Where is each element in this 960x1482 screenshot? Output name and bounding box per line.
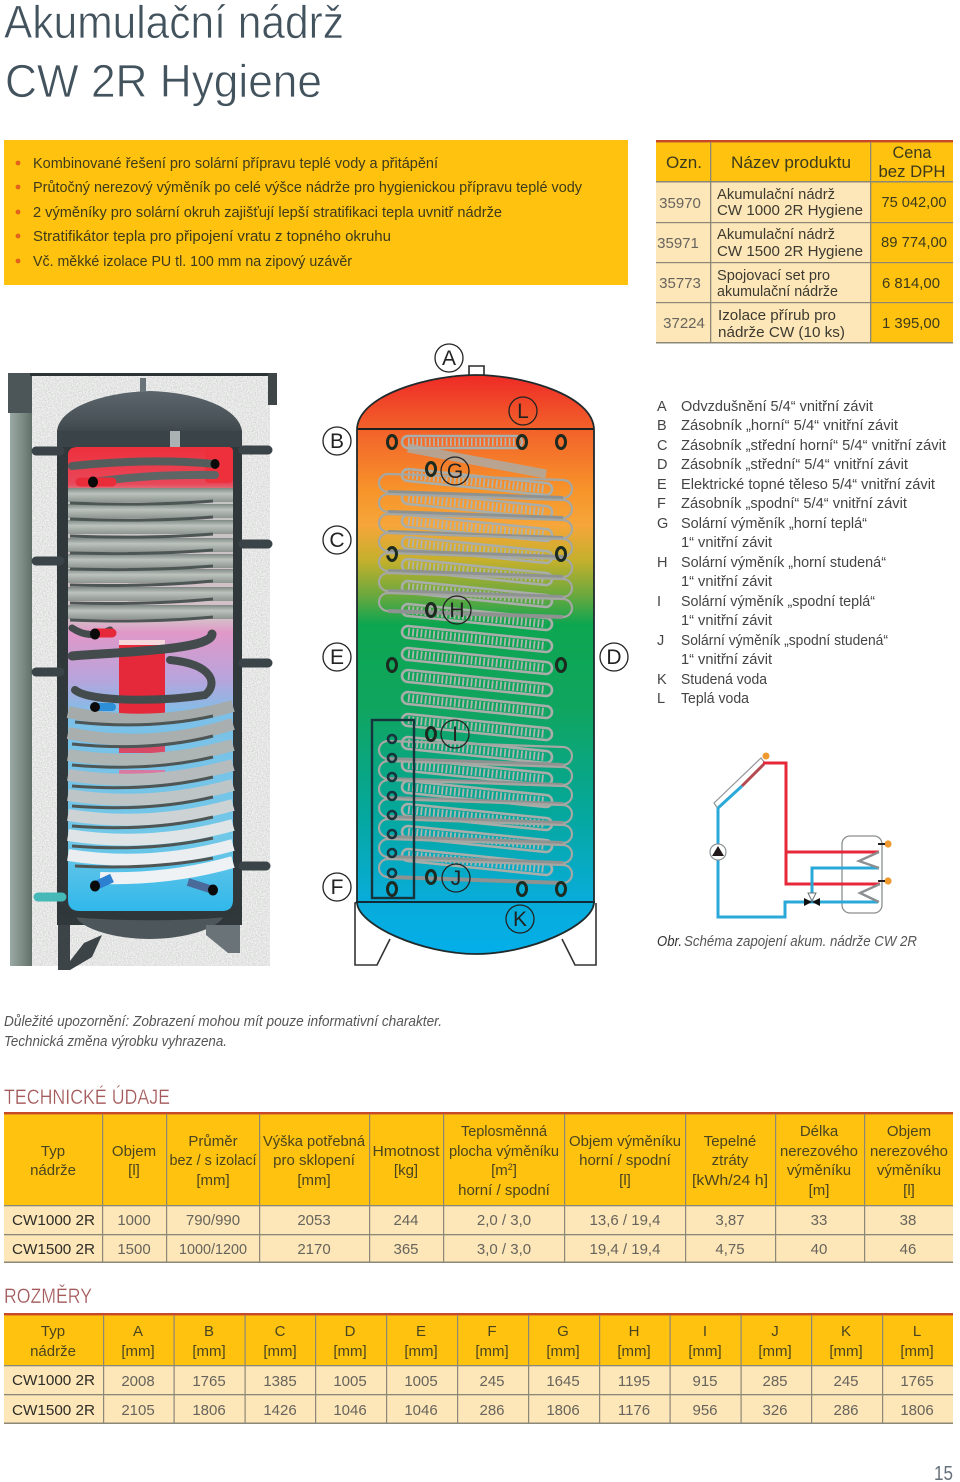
row: CW1000 2R: 1005	[404, 1373, 438, 1390]
table header: [l]	[128, 1162, 140, 1179]
table header: [mm]	[688, 1343, 722, 1360]
red top zone and upper corrugated coil	[72, 447, 233, 483]
tank cross-section diagram: K	[513, 908, 527, 931]
row: CW1000 2R: 1195	[618, 1373, 650, 1390]
table header: E	[416, 1323, 426, 1340]
table header: [l]	[619, 1172, 631, 1189]
pump	[710, 844, 726, 860]
table header: nerezového	[780, 1143, 858, 1160]
legend of connections: Zásobník „horní“ 5/4“ vnitřní závit	[681, 418, 898, 434]
row: CW1500 2R: 3,0 / 3,0	[477, 1241, 531, 1258]
row: CW1500 2R: 2170	[297, 1241, 331, 1258]
table header: L	[913, 1323, 921, 1340]
row: CW1000 2R: 790/990	[186, 1212, 240, 1229]
table header: výměníku	[787, 1162, 851, 1179]
row: CW1000 2R: CW1000 2R	[12, 1372, 95, 1389]
tank cross-section diagram: H	[449, 599, 465, 622]
price table: akumulační nádrže	[717, 283, 838, 300]
tank cross-section diagram: D	[606, 646, 622, 669]
table header: Typ	[41, 1143, 65, 1160]
panel: feature list: Stratifikátor tepla pro připojení vratu z topného okruhu	[33, 228, 391, 245]
legend of connections: Zásobník „spodní“ 5/4“ vnitřní závit	[681, 496, 907, 512]
table header: Objem výměníku	[569, 1133, 681, 1150]
row: CW1500 2R: 19,4 / 19,4	[590, 1241, 660, 1258]
silver coil rows: lower	[68, 706, 233, 878]
title: CW 2R Hygiene	[5, 55, 322, 107]
tank cross-section diagram: B	[330, 430, 344, 453]
legend of connections: B	[657, 418, 667, 434]
price table: Izolace přírub pro	[718, 307, 836, 324]
row: CW1000 2R: 244	[393, 1212, 419, 1229]
solar connection schematic	[710, 752, 892, 917]
table header: A	[133, 1323, 143, 1340]
legend of connections: L	[657, 691, 665, 707]
legend of connections: A	[657, 399, 667, 415]
table header: G	[557, 1323, 569, 1340]
table header	[30, 1123, 948, 1199]
table header: [mm]	[121, 1343, 155, 1360]
tank vessel	[57, 378, 242, 970]
row: CW1000 2R: 1765	[192, 1373, 226, 1390]
table header: 2	[508, 1162, 513, 1172]
price table: 89 774,00	[881, 234, 947, 251]
table header: Objem	[887, 1123, 931, 1140]
price table: 35971	[657, 235, 699, 252]
insulation	[8, 373, 277, 966]
table header: [mm]	[297, 1172, 331, 1189]
panel: feature list: 2 výměníky pro solární okruh zajišťují lepší stratifikaci tepla uvnitř nádrže	[33, 204, 502, 221]
legend of connections: Solární výměník „horní teplá“	[681, 516, 867, 532]
legend of connections: Zásobník „střední horní“ 5/4“ vnitřní závit	[681, 438, 946, 454]
table header: nerezového	[870, 1143, 948, 1160]
tank cross-section diagram: L	[517, 400, 529, 423]
price table: nádrže CW (10 ks)	[718, 324, 845, 341]
table header: Hmotnost	[372, 1143, 440, 1160]
row: CW1500 2R: 286	[833, 1402, 859, 1419]
row: CW1500 2R: 1046	[404, 1402, 438, 1419]
notice	[4, 1013, 442, 1050]
legend of connections: Teplá voda	[681, 691, 750, 707]
legend of connections: Studená voda	[681, 672, 768, 688]
row: CW1500 2R: 4,75	[715, 1241, 745, 1258]
table header: Objem	[112, 1143, 156, 1160]
table header: [mm]	[475, 1343, 509, 1360]
table header: [mm]	[196, 1172, 230, 1189]
legend of connections: 1“ vnitřní závit	[681, 535, 772, 551]
row: CW1000 2R	[12, 1372, 934, 1390]
vessel outline	[355, 366, 596, 965]
table header: H	[629, 1323, 639, 1340]
technical data table	[4, 1112, 953, 1263]
row: CW1500 2R: 286	[479, 1402, 505, 1419]
table header	[30, 1323, 934, 1360]
panel: feature list: Průtočný nerezový výměník po celé výšce nádrže pro hygienickou přípravu teplé vody	[33, 179, 582, 196]
heat exchanger coils	[379, 436, 572, 883]
table header: výměníku	[877, 1162, 941, 1179]
cutaway tank illustration	[8, 373, 277, 970]
price table: 35773	[659, 275, 701, 292]
pipe connectors	[88, 459, 220, 896]
legend of connections: Zásobník „střední“ 5/4“ vnitřní závit	[681, 457, 908, 473]
row: CW1000 2R: 13,6 / 19,4	[590, 1212, 660, 1229]
price table: CW 1500 2R Hygiene	[717, 243, 863, 260]
row: CW1500 2R: 1426	[263, 1402, 297, 1419]
row: CW1500 2R	[12, 1241, 916, 1258]
legend of connections: 1“ vnitřní závit	[681, 652, 772, 668]
table header: [kg]	[394, 1162, 418, 1179]
table header: ztráty	[712, 1152, 749, 1169]
table header: Průměr	[188, 1133, 238, 1150]
row: CW1000 2R	[12, 1212, 916, 1229]
legend of connections: Odvzdušnění 5/4“ vnitřní závit	[681, 399, 873, 415]
row: CW1000 2R: 1645	[546, 1373, 580, 1390]
table header: ]	[513, 1162, 517, 1179]
row: CW1500 2R: 1806	[192, 1402, 226, 1419]
row: CW1500 2R: 326	[762, 1402, 788, 1419]
row: CW1500 2R: 1500	[117, 1241, 151, 1258]
table header: plocha výměníku	[449, 1143, 559, 1160]
price table: Cena	[892, 143, 932, 162]
panel: feature list	[4, 140, 628, 285]
table header: J	[771, 1323, 779, 1340]
red flow pipes	[763, 763, 880, 884]
tank cross-section diagram: I	[452, 723, 458, 746]
row: CW1000 2R: 245	[833, 1373, 859, 1390]
row: CW1500 2R: 1046	[333, 1402, 367, 1419]
price table: Akumulační nádrž	[717, 186, 835, 203]
legend of connections	[657, 399, 946, 707]
table header: [mm]	[829, 1343, 863, 1360]
table header: I	[703, 1323, 707, 1340]
tank cross-section diagram: E	[330, 646, 344, 669]
heading: dimensions: ROZMĚRY	[4, 1285, 92, 1308]
tank cross-section diagram: G	[447, 460, 463, 483]
row: CW1000 2R: 2,0 / 3,0	[477, 1212, 531, 1229]
panel: feature list: Vč. měkké izolace PU tl. 100 mm na zipový uzávěr	[33, 253, 352, 270]
tank cross-section diagram	[323, 344, 628, 965]
table header: Výška potřebná	[263, 1133, 366, 1150]
row: CW1500 2R: 46	[900, 1241, 916, 1258]
table header: horní / spodní	[458, 1182, 551, 1199]
tank cross-section diagram: A	[442, 347, 456, 370]
table header: [l]	[903, 1182, 915, 1199]
table header: [mm]	[333, 1343, 367, 1360]
row: CW1000 2R: 1385	[263, 1373, 297, 1390]
row: CW1500 2R: 40	[811, 1241, 827, 1258]
legend of connections: C	[657, 438, 667, 454]
legend of connections: Solární výměník „spodní teplá“	[681, 594, 875, 610]
row: CW1000 2R: 38	[900, 1212, 916, 1229]
port labels	[323, 344, 628, 933]
panel: feature list: Kombinované řešení pro solární přípravu teplé vody a přitápění	[33, 155, 439, 172]
table header: [m	[491, 1162, 508, 1179]
storage tank	[842, 836, 882, 913]
row: CW1500 2R: CW1500 2R	[12, 1402, 95, 1419]
table header: horní / spodní	[579, 1152, 672, 1169]
legend of connections: Elektrické topné těleso 5/4“ vnitřní závit	[681, 477, 935, 493]
row: CW1000 2R: 3,87	[715, 1212, 745, 1229]
row: CW1500 2R	[12, 1402, 934, 1419]
row: CW1000 2R: 1765	[900, 1373, 934, 1390]
pipe fittings	[36, 450, 268, 897]
table header: Délka	[800, 1123, 839, 1140]
tank cross-section diagram: F	[331, 876, 343, 899]
price table: 35970	[659, 195, 701, 212]
electric heater cylinder	[119, 640, 165, 782]
price table: Název produktu	[731, 153, 851, 172]
row: CW1500 2R: 1176	[618, 1402, 650, 1419]
table header: [kWh/24 h]	[692, 1172, 768, 1189]
table header: F	[487, 1323, 497, 1340]
price table: 75 042,00	[882, 194, 946, 211]
three-way valve	[804, 893, 820, 906]
row: CW1500 2R: CW1500 2R	[12, 1241, 95, 1258]
table header: [mm]	[617, 1343, 651, 1360]
row: CW1000 2R: 1000	[117, 1212, 151, 1229]
legend of connections: I	[657, 594, 661, 610]
table header: [mm]	[758, 1343, 792, 1360]
sensor rail	[372, 720, 414, 898]
legend of connections: 1“ vnitřní závit	[681, 613, 772, 629]
row: CW1000 2R: 915	[692, 1373, 718, 1390]
row: CW1000 2R: CW1000 2R	[12, 1212, 95, 1229]
table header: [mm]	[900, 1343, 934, 1360]
legend of connections: 1“ vnitřní závit	[681, 574, 772, 590]
price table: Akumulační nádrž	[717, 226, 835, 243]
table header: [mm]	[546, 1343, 580, 1360]
table header: nádrže	[30, 1343, 76, 1360]
table header: nádrže	[30, 1162, 76, 1179]
price table: bez DPH	[878, 162, 946, 181]
row: CW1500 2R: 1806	[546, 1402, 580, 1419]
table header: bez / s izolací	[170, 1152, 257, 1169]
schematic caption: Obr.	[657, 933, 682, 950]
row: CW1500 2R: 2105	[121, 1402, 155, 1419]
table header: [m]	[809, 1182, 829, 1199]
connection ports	[388, 436, 566, 896]
row: CW1000 2R: 33	[811, 1212, 827, 1229]
price table: Spojovací set pro	[717, 267, 830, 284]
tank cross-section diagram: J	[451, 867, 461, 890]
heading: technical data: TECHNICKÉ ÚDAJE	[4, 1086, 170, 1109]
legend of connections: E	[657, 477, 667, 493]
row: CW1500 2R: 1000/1200	[179, 1241, 247, 1258]
table header: Typ	[41, 1323, 65, 1340]
table header: [mm]	[404, 1343, 438, 1360]
table header: Teplosměnná	[461, 1123, 548, 1140]
row: CW1000 2R: 245	[479, 1373, 505, 1390]
legend of connections: D	[657, 457, 667, 473]
tank cross-section diagram: C	[329, 529, 345, 552]
row: CW1000 2R: 2053	[297, 1212, 331, 1229]
row: CW1500 2R: 1806	[900, 1402, 934, 1419]
legend of connections: H	[657, 555, 667, 571]
price table: 37224	[663, 315, 705, 332]
legend of connections: F	[657, 496, 666, 512]
notice: Důležité upozornění: Zobrazení mohou mít pouze informativní charakter.	[4, 1013, 442, 1030]
row: CW1000 2R: 2008	[121, 1373, 155, 1390]
table header: C	[275, 1323, 286, 1340]
legend of connections: J	[657, 633, 664, 649]
legend of connections: G	[657, 516, 668, 532]
row: CW1000 2R: 1005	[333, 1373, 367, 1390]
table header: pro sklopení	[273, 1152, 356, 1169]
notice: Technická změna výrobku vyhrazena.	[4, 1033, 227, 1050]
legend of connections: K	[657, 672, 667, 688]
table header: Tepelné	[704, 1133, 756, 1150]
table header: [mm]	[192, 1343, 226, 1360]
table header: D	[345, 1323, 356, 1340]
title	[4, 0, 344, 107]
price table: 6 814,00	[882, 275, 940, 292]
row: CW1500 2R: 365	[393, 1241, 419, 1258]
table header: K	[841, 1323, 851, 1340]
temperature sensors	[878, 840, 892, 885]
silver coil rows: upper	[68, 488, 233, 619]
row: CW1000 2R: 285	[762, 1373, 788, 1390]
price table	[656, 140, 953, 344]
schematic caption: Schéma zapojení akum. nádrže CW 2R	[684, 933, 917, 950]
table header: B	[204, 1323, 214, 1340]
solar collector	[714, 752, 770, 809]
blue return pipes	[718, 808, 879, 917]
legend of connections: Solární výměník „horní studená“	[681, 555, 886, 571]
price table: 1 395,00	[882, 315, 940, 332]
exchanger coils	[859, 852, 880, 902]
dimensions table	[4, 1313, 953, 1424]
row: CW1500 2R: 956	[692, 1402, 718, 1419]
legend of connections: Solární výměník „spodní studená“	[681, 633, 888, 649]
price table: CW 1000 2R Hygiene	[717, 202, 863, 219]
price table: Ozn.	[666, 153, 702, 172]
table header: [mm]	[263, 1343, 297, 1360]
dark lower corrugated coil	[72, 628, 212, 707]
